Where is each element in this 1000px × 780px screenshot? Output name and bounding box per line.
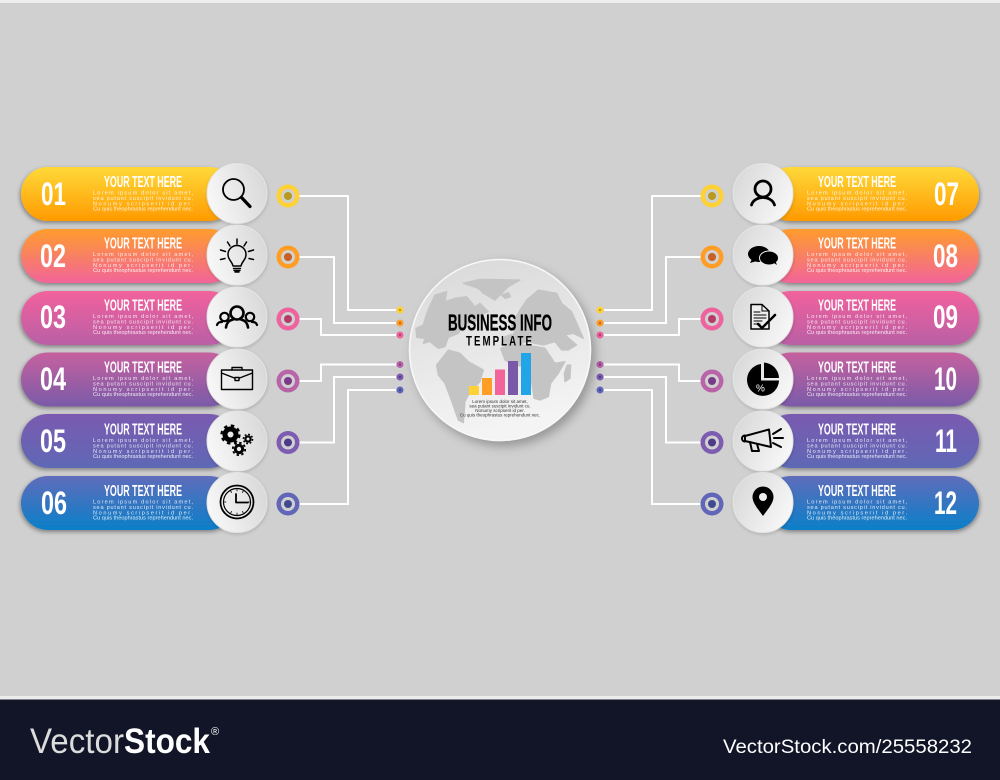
icon circle 10 (733, 349, 793, 409)
world map (416, 279, 583, 423)
body text 05: Lorem ipsum dolor sit amet, (93, 438, 193, 444)
number 05: 05 (40, 423, 66, 459)
footer logo (30, 722, 219, 761)
body text 01: Lorem ipsum dolor sit amet, (93, 190, 193, 196)
body text 05: Nonumy scripserit id per. (93, 449, 193, 455)
panel: item 08 (733, 225, 979, 285)
body text 12: Lorem ipsum dolor sit amet, (807, 500, 907, 506)
heading 06: YOUR TEXT HERE (104, 483, 182, 500)
body text 07: Nonumy scripserit id per. (807, 202, 907, 208)
body text 10: sea putant suscipit invidunt cu. (807, 382, 907, 388)
body text 02: Nonumy scripserit id per. (93, 263, 193, 269)
number 07: 07 (934, 176, 959, 212)
heading 01: YOUR TEXT HERE (104, 174, 182, 191)
body text 09: Cu quis theophrastus reprehendunt nec. (807, 330, 907, 336)
body text 04 (93, 376, 193, 398)
body text 07: sea putant suscipit invidunt cu. (807, 196, 907, 202)
body text 11 (807, 438, 907, 460)
body text 09: Nonumy scripserit id per. (807, 325, 907, 331)
body text 04: Lorem ipsum dolor sit amet, (93, 376, 193, 382)
small terminal dots: left (396, 306, 404, 394)
body text 03: Nonumy scripserit id per. (93, 325, 193, 331)
body text 05 (93, 438, 193, 460)
number 06: 06 (41, 485, 67, 521)
body text 06: Nonumy scripserit id per. (93, 510, 193, 516)
body text 08: Nonumy scripserit id per. (807, 263, 907, 269)
body text 11: Cu quis theophrastus reprehendunt nec. (807, 454, 907, 460)
body text 10: Nonumy scripserit id per. (807, 387, 907, 393)
icon: megaphone (742, 429, 783, 451)
icon: briefcase (222, 368, 252, 390)
body text 08: sea putant suscipit invidunt cu. (807, 258, 907, 264)
body text 09: sea putant suscipit invidunt cu. (807, 320, 907, 326)
connector lines: right (604, 196, 701, 504)
number 04: 04 (40, 361, 66, 397)
icon circle 09 (733, 287, 793, 347)
bottom light strip (0, 696, 1000, 700)
heading 11: YOUR TEXT HERE (818, 422, 896, 438)
bar 11 (764, 414, 979, 468)
body text 06: Cu quis theophrastus reprehendunt nec. (93, 516, 193, 522)
body text 12 (807, 500, 907, 522)
icon: document with check (751, 304, 775, 329)
icon circle 03 (207, 287, 267, 347)
centre caption: Cu quis theophrastus reprehendunt nec. (460, 412, 540, 418)
centre caption: Nonumy scripserit id per. (475, 408, 525, 413)
body text 04: sea putant suscipit invidunt cu. (93, 382, 193, 388)
panel: item 10 (733, 349, 979, 409)
number 11: 11 (935, 423, 957, 459)
body text 09: Lorem ipsum dolor sit amet, (807, 314, 907, 320)
connector dots: right (700, 184, 724, 516)
body text 08: Lorem ipsum dolor sit amet, (807, 252, 907, 258)
body text 06: sea putant suscipit invidunt cu. (93, 505, 193, 511)
icon: gears (222, 426, 253, 455)
icon circle 07 (733, 164, 793, 224)
panel: item 09 (733, 287, 979, 347)
footer id: VectorStock.com/25558232 (723, 736, 972, 758)
body text 02: Cu quis theophrastus reprehendunt nec. (93, 268, 193, 274)
icon: user (752, 181, 774, 205)
panel: item 06 (21, 472, 267, 532)
number 01: 01 (41, 176, 66, 212)
body text 11: Nonumy scripserit id per. (807, 449, 907, 455)
bar 01 (21, 167, 236, 221)
heading 04: YOUR TEXT HERE (104, 360, 182, 376)
footer logo: Stock (124, 722, 210, 761)
icon circle 05 (207, 411, 267, 471)
bar 03 (21, 291, 236, 345)
panel: item 05 (21, 411, 267, 471)
bar 07 (764, 167, 979, 221)
body text 08: Cu quis theophrastus reprehendunt nec. (807, 268, 907, 274)
number 02: 02 (40, 238, 66, 274)
body text 02: sea putant suscipit invidunt cu. (93, 258, 193, 264)
body text 11: sea putant suscipit invidunt cu. (807, 444, 907, 450)
panel: item 03 (21, 287, 267, 347)
icon circle 01 (207, 164, 267, 224)
body text 10: Lorem ipsum dolor sit amet, (807, 376, 907, 382)
body text 05: sea putant suscipit invidunt cu. (93, 444, 193, 450)
footer logo: Vector (30, 722, 124, 761)
bar 08 (764, 229, 979, 283)
icon: clock (220, 486, 254, 518)
body text 12: sea putant suscipit invidunt cu. (807, 505, 907, 511)
bar 10 (764, 352, 979, 406)
connector dots: left (276, 184, 300, 516)
icon circle 02 (207, 225, 267, 285)
heading 09: YOUR TEXT HERE (818, 298, 896, 315)
panel: item 11 (733, 411, 979, 471)
body text 01: Cu quis theophrastus reprehendunt nec. (93, 206, 193, 212)
icon: team (217, 306, 257, 328)
centre caption: Lorem ipsum dolor sit amet, (472, 399, 528, 404)
panel: item 12 (733, 472, 979, 532)
number 08: 08 (933, 238, 958, 274)
centre caption: sea putant suscipit invidunt cu. (469, 404, 531, 408)
number 10: 10 (934, 361, 957, 397)
panel: central globe (410, 260, 590, 440)
centre caption (460, 399, 540, 418)
panel: item 07 (733, 164, 979, 224)
body text 06: Lorem ipsum dolor sit amet, (93, 500, 193, 506)
body text 10: Cu quis theophrastus reprehendunt nec. (807, 392, 907, 398)
bar 04 (21, 352, 236, 406)
body text 07 (807, 190, 907, 212)
connector lines: left (299, 196, 396, 504)
title: BUSINESS INFO (448, 310, 552, 336)
heading 08: YOUR TEXT HERE (818, 236, 896, 253)
icon: pie chart: % (756, 384, 765, 394)
body text 01: sea putant suscipit invidunt cu. (93, 196, 193, 202)
icon: magnifier (223, 179, 250, 206)
number 12: 12 (934, 485, 957, 521)
body text 04: Nonumy scripserit id per. (93, 387, 193, 393)
icon circle 11 (733, 411, 793, 471)
body text 11: Lorem ipsum dolor sit amet, (807, 438, 907, 444)
body text 08 (807, 252, 907, 274)
heading 10: YOUR TEXT HERE (818, 360, 896, 376)
icon: chat bubbles (748, 246, 778, 265)
number 09: 09 (933, 299, 958, 335)
bar 05 (21, 414, 236, 468)
body text 06 (93, 500, 193, 522)
body text 07: Cu quis theophrastus reprehendunt nec. (807, 206, 907, 212)
heading 07: YOUR TEXT HERE (818, 174, 896, 191)
icon circle 12 (733, 472, 793, 532)
icon circle 06 (207, 472, 267, 532)
body text 07: Lorem ipsum dolor sit amet, (807, 190, 907, 196)
body text 10 (807, 376, 907, 398)
heading 05: YOUR TEXT HERE (104, 422, 182, 438)
bar 12 (764, 476, 979, 530)
panel: item 01 (21, 164, 267, 224)
body text 03: Lorem ipsum dolor sit amet, (93, 314, 193, 320)
icon: location pin (752, 487, 774, 516)
body text 01 (93, 190, 193, 212)
top edge strip (0, 0, 1000, 3)
panel: item 02 (21, 225, 267, 285)
panel: item 04 (21, 349, 267, 409)
heading 03: YOUR TEXT HERE (104, 298, 182, 315)
body text 02 (93, 252, 193, 274)
icon: light bulb (220, 239, 254, 272)
heading 12: YOUR TEXT HERE (818, 483, 896, 500)
footer band (0, 700, 1000, 780)
body text 03: sea putant suscipit invidunt cu. (93, 320, 193, 326)
subtitle: TEMPLATE (466, 332, 534, 348)
body text 12: Nonumy scripserit id per. (807, 510, 907, 516)
body text 03: Cu quis theophrastus reprehendunt nec. (93, 330, 193, 336)
bar 06 (21, 476, 236, 530)
bar 09 (764, 291, 979, 345)
body text 02: Lorem ipsum dolor sit amet, (93, 252, 193, 258)
footer logo: ® (211, 726, 219, 738)
body text 01: Nonumy scripserit id per. (93, 202, 193, 208)
icon: pie chart (747, 362, 779, 396)
body text 05: Cu quis theophrastus reprehendunt nec. (93, 454, 193, 460)
body text 04: Cu quis theophrastus reprehendunt nec. (93, 392, 193, 398)
bar 02 (21, 229, 236, 283)
bar chart (469, 353, 531, 395)
icon circle 08 (733, 225, 793, 285)
body text 03 (93, 314, 193, 336)
body text 12: Cu quis theophrastus reprehendunt nec. (807, 516, 907, 522)
icon circle 04 (207, 349, 267, 409)
globe disc (410, 260, 590, 440)
heading 02: YOUR TEXT HERE (104, 236, 182, 253)
small terminal dots: right (596, 306, 604, 394)
number 03: 03 (40, 299, 66, 335)
body text 09 (807, 314, 907, 336)
